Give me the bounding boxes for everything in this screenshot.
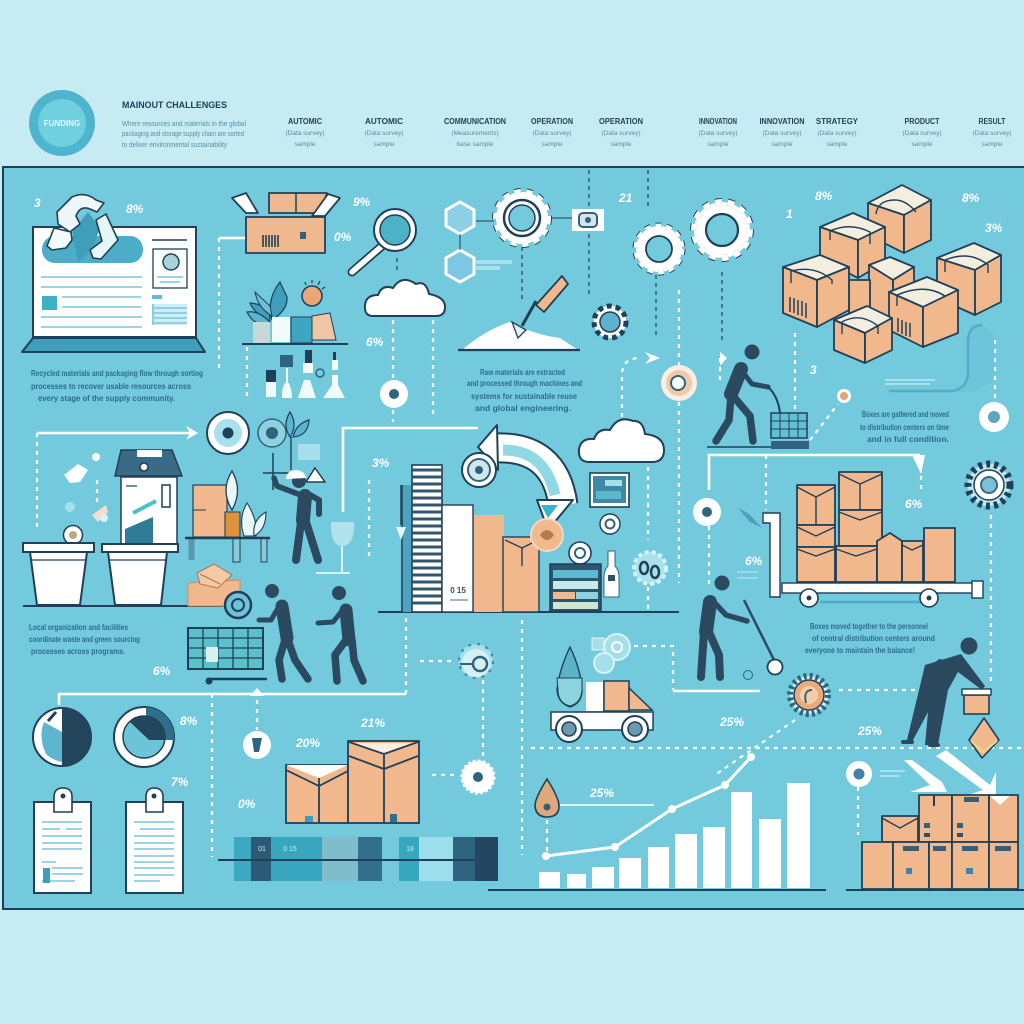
header title and description: [122, 100, 246, 149]
text block 5: everyone to maintain the balance!: [805, 646, 915, 655]
header columns: (Data survey): [698, 130, 738, 137]
label: chart percents: 8%: [180, 714, 198, 728]
icon: building: [115, 450, 182, 545]
icon: cloud lower: [579, 419, 664, 462]
label: cluster percentages: 1: [786, 207, 793, 221]
person: lifting box: [903, 638, 991, 745]
header columns: (Data survey): [762, 130, 802, 137]
colour strip chart: 18: [406, 846, 414, 853]
icon: gear three: [694, 202, 750, 258]
label: box percentages: [334, 195, 371, 244]
header badge: [29, 90, 95, 156]
callout bracket: [885, 325, 995, 392]
text block 2: and processed through machines and: [467, 379, 582, 388]
colour strip chart: [218, 837, 498, 881]
header title and description: MAINOUT CHALLENGES: [122, 100, 227, 110]
header columns: sample: [542, 141, 563, 148]
person: raising tool: [263, 453, 325, 560]
header columns: INNOVATION: [760, 117, 805, 126]
node: left white: [243, 731, 271, 759]
icon: splash gear: [634, 552, 666, 584]
text block 5: Boxes moved together to the personnel: [810, 622, 928, 631]
connector lines: [37, 170, 1024, 857]
label: cluster percentages: 3%: [985, 221, 1003, 235]
label: chart value: 25%: [589, 786, 614, 800]
icon: hexagons: [446, 202, 512, 282]
label: shelf percent: 6%: [366, 335, 384, 349]
icon: plant badge: [258, 412, 320, 470]
bar chart with trend line: [488, 753, 826, 890]
header columns: INNOVATION: [699, 117, 737, 126]
header badge: FUNDING: [44, 119, 80, 128]
icon: magnifier: [352, 209, 416, 272]
header columns: (Measurements): [451, 130, 499, 137]
person: right worker: [318, 586, 363, 681]
node: small orange pin: [837, 389, 851, 403]
header columns: AUTOMIC: [288, 117, 322, 126]
header title and description: packaging and storage supply chain are sorted: [122, 131, 244, 138]
label: mid-right percent note: 6%: [745, 554, 763, 568]
node: left lower cog: [462, 761, 494, 793]
text block 4: processes across programs.: [31, 647, 125, 656]
text block 4: coordinate waste and green sourcing: [29, 635, 140, 644]
icon: white down arrows: [904, 750, 996, 795]
header columns: COMMUNICATION: [444, 117, 506, 126]
icon: shopping cart grid: [188, 628, 267, 684]
text block 4: Local organization and facilities: [29, 623, 128, 632]
label: centre percent: 3%: [372, 456, 390, 470]
icon: spiral badge: [462, 453, 496, 487]
header columns: sample: [772, 141, 793, 148]
main panel: [3, 167, 1024, 909]
colour strip chart: 01: [258, 846, 266, 853]
label: bar box percents: 0%: [238, 797, 256, 811]
icon: large opened boxes: [286, 741, 419, 823]
label: line percents: 25%: [857, 724, 882, 738]
label: bar box percents: 20%: [295, 736, 320, 750]
header title and description: Where resources and materials in the global: [122, 121, 246, 128]
header columns: OPERATION: [599, 117, 643, 126]
header columns: sample: [708, 141, 729, 148]
header columns: RESULT: [978, 117, 1006, 126]
panel: laptop report: [22, 227, 205, 352]
icon: small image tag: [551, 209, 604, 231]
node: orange ring: [661, 365, 697, 401]
text block 2: [467, 368, 582, 413]
text block 3: to distribution centers on time: [860, 423, 949, 432]
icon: big curved arrow: [478, 425, 573, 530]
text block 2: systems for sustainable reuse: [471, 392, 578, 401]
node: trolley left white: [693, 498, 721, 526]
label: line percents: 25%: [719, 715, 744, 729]
header columns: (Data survey): [364, 130, 404, 137]
header columns: (Data survey): [902, 130, 942, 137]
icon: gear two: [636, 226, 682, 272]
icon: parcels and badge: [188, 564, 251, 618]
text block 2: Raw materials are extracted: [480, 368, 565, 377]
icon: shelves and bottle: [550, 542, 619, 611]
icon: plants and supplies shelf: [242, 280, 348, 344]
header columns: sample: [611, 141, 632, 148]
header columns: sample: [982, 141, 1003, 148]
label: chart percents: 7%: [171, 775, 189, 789]
icon: right dark gear: [968, 464, 1010, 506]
header columns: (Data survey): [817, 130, 857, 137]
text block 5: of central distribution centers around: [812, 634, 935, 643]
icon: central striped building: 0 15: [450, 586, 466, 595]
icon: small round badge: [64, 526, 82, 544]
icon: cardboard box cluster: [783, 185, 1001, 363]
label: gears numbers: 21: [618, 191, 633, 205]
icon: shovel and mound: [458, 276, 580, 350]
icon: trolley with stacked boxes: [738, 472, 983, 607]
header columns: [285, 117, 1012, 148]
header columns: STRATEGY: [816, 117, 859, 126]
colour strip chart: 0 15: [283, 846, 297, 853]
icon: open cardboard box: [232, 193, 340, 253]
label: section 1 numbers: 3: [34, 196, 41, 210]
header title and description: to deliver environmental sustainability: [122, 142, 227, 149]
node: main orange gear: [790, 676, 828, 714]
header columns: sample: [827, 141, 848, 148]
icon: drop marker: [535, 779, 654, 817]
icon: truck smoke bubbles: [592, 634, 630, 673]
icon: down arrow marker: [396, 485, 406, 540]
header columns: (Data survey): [285, 130, 325, 137]
icon: pie chart: [33, 708, 91, 766]
icon: clipboard left: [34, 788, 91, 893]
label: cluster percentages: 8%: [962, 191, 980, 205]
node: lower right badge: [846, 761, 905, 787]
icon: table with box and plant: [185, 471, 270, 562]
header columns: sample: [295, 141, 316, 148]
label: mid-right percent note: [737, 554, 763, 578]
icon: falling diamond box: [969, 718, 999, 758]
icon: scattered scraps: [64, 453, 108, 522]
header columns: sample: [374, 141, 395, 148]
text block 4: [29, 623, 140, 656]
header columns: AUTOMIC: [365, 117, 403, 126]
text block 3: [860, 410, 949, 444]
icon: cloud top: [365, 280, 445, 316]
text block 3: Boxes are gathered and moved: [862, 410, 949, 419]
icon: small dark gear: [594, 306, 626, 338]
label: box percentages: 9%: [353, 195, 371, 209]
text block 2: and global engineering.: [475, 404, 571, 413]
icon: gear one: [496, 192, 548, 244]
label: trolley percent: 6%: [905, 497, 923, 511]
label: cluster percentages: 3: [810, 363, 817, 377]
header columns: (Data survey): [532, 130, 572, 137]
header columns: PRODUCT: [904, 117, 940, 126]
person: left worker: [259, 584, 308, 679]
node: right white: [979, 402, 1009, 432]
icon: recycle arrows: [47, 195, 118, 262]
label: bar box percents: 21%: [360, 716, 385, 730]
label: section 1 numbers: [34, 196, 144, 216]
icon: monitor: [590, 473, 629, 507]
person: mop worker: [701, 576, 782, 680]
text block 1: every stage of the supply community.: [38, 394, 175, 403]
label: section 1 numbers: 8%: [126, 202, 144, 216]
header columns: (Data survey): [601, 130, 641, 137]
label: bar box percents: [238, 716, 385, 811]
icon: orange badge: [531, 519, 563, 551]
text block 1: Recycled materials and packaging flow through sorting: [31, 369, 203, 378]
arrowheads: [186, 352, 925, 696]
text block 1: [31, 369, 203, 403]
text block 5: [805, 622, 935, 655]
icon: wine glass: [316, 522, 354, 573]
icon: clipboard right: [126, 788, 183, 893]
person: pushing cart: [707, 344, 809, 449]
label: chart percents: [171, 714, 198, 789]
header columns: sample: [912, 141, 933, 148]
icon: eye target: [207, 412, 249, 454]
icon: delivery truck: [551, 647, 653, 742]
icon: recycling bins: [23, 543, 223, 606]
node: left upper cog: [459, 644, 493, 678]
icon: donut chart: [114, 707, 174, 767]
text block 1: processes to recover usable resources across: [31, 382, 191, 391]
label: left percent: 6%: [153, 664, 171, 678]
icon: central striped building: [378, 465, 679, 612]
header columns: OPERATION: [531, 117, 573, 126]
label: line percents: [719, 715, 882, 738]
text block 3: and in full condition.: [867, 435, 949, 444]
icon: monitor badge: [600, 514, 620, 534]
header columns: (Data survey): [972, 130, 1012, 137]
label: cluster percentages: [786, 189, 1003, 377]
node: network: [380, 380, 408, 408]
label: cluster percentages: 8%: [815, 189, 833, 203]
header columns: base sample: [457, 141, 494, 148]
label: box percentages: 0%: [334, 230, 352, 244]
icon: stacked cartons bottom right: [846, 795, 1024, 890]
icon: small bottles: [266, 350, 345, 398]
